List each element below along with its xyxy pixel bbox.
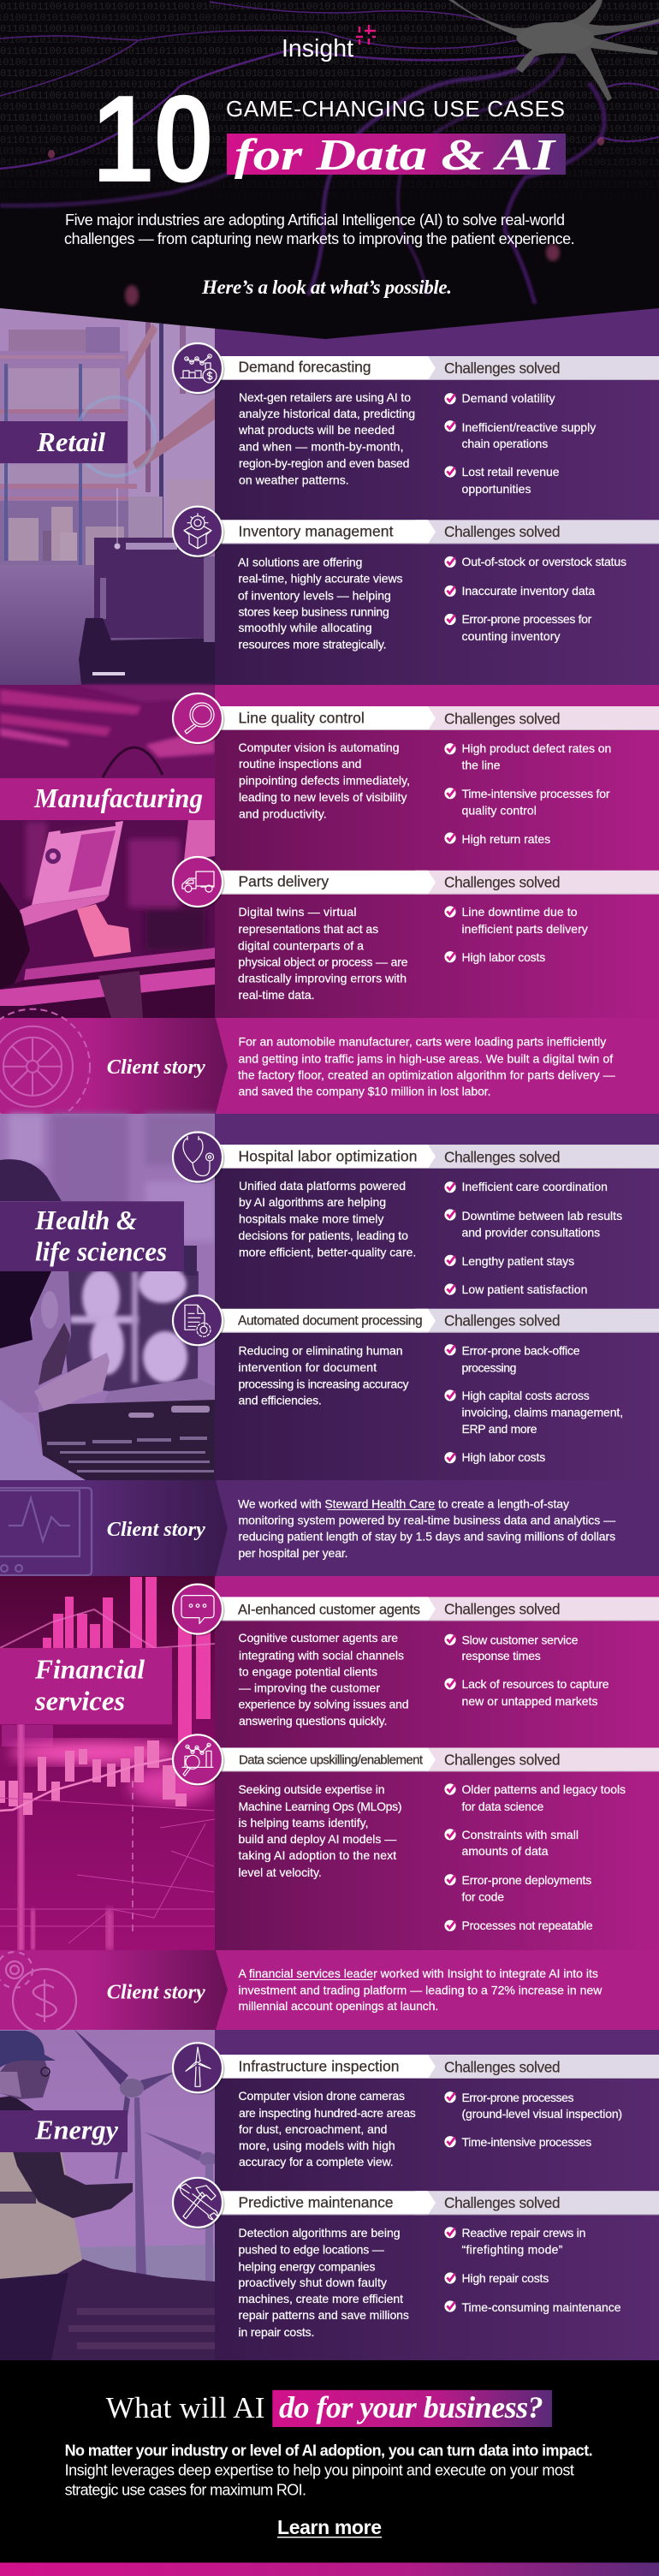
- panel: client story, automotive: [0, 1009, 659, 1124]
- use case: Predictive maintenance: [173, 2178, 659, 2339]
- industry label: Financial services: Financial: [34, 1654, 145, 1685]
- description: leading to new levels of visibility: [239, 790, 407, 804]
- header: [0, 0, 659, 339]
- description: [238, 390, 415, 486]
- industry label: Manufacturing: Manufacturing: [33, 782, 203, 813]
- use case: Data science upskilling: [173, 1734, 659, 1932]
- description: [238, 1343, 409, 1407]
- use case: Automated document processing: [173, 1295, 659, 1464]
- description: hospitals make more timely: [239, 1211, 383, 1225]
- photo: warehouse: [0, 308, 216, 685]
- description: [238, 2089, 416, 2168]
- use case: Inventory management: [173, 507, 659, 651]
- description: pinpointing defects immediately,: [239, 773, 410, 787]
- title band: Challenges solved: [444, 2194, 561, 2211]
- panel: manufacturing: [0, 685, 659, 1018]
- challenges list: Line downtime due to: [462, 905, 578, 919]
- title band: Challenges solved: [444, 360, 561, 377]
- industry label: Health and life sciences: Health &: [34, 1205, 137, 1235]
- industry label: Energy: Energy: [34, 2114, 119, 2145]
- industry label: Financial services: [0, 1648, 172, 1724]
- challenges list: Lengthy patient stays: [462, 1254, 574, 1268]
- description: routine inspections and: [239, 757, 361, 770]
- description: intervention for document: [238, 1360, 377, 1374]
- description: level at velocity.: [238, 1865, 322, 1879]
- story text: A financial services leader worked with Insight to integrate AI into its: [238, 1966, 598, 1980]
- challenges list: Processes not repeatable: [462, 1919, 593, 1932]
- challenges list: High labor costs: [462, 950, 545, 964]
- description: [238, 1782, 402, 1879]
- challenges list: quality control: [462, 803, 537, 817]
- description: Unified data platforms powered: [239, 1179, 406, 1193]
- description: Next-gen retailers are using AI to: [239, 390, 411, 404]
- challenges list: [444, 1180, 622, 1296]
- description: and efficiencies.: [238, 1393, 322, 1407]
- description: digital counterparts of a: [238, 938, 364, 952]
- heading: client story: Client story: [107, 1982, 205, 2004]
- icon: chart with magnifier: [173, 1734, 224, 1787]
- challenges list: [444, 1343, 623, 1464]
- challenges list: Error-prone deployments: [462, 1873, 591, 1887]
- description: more, using models with high: [239, 2139, 395, 2152]
- title band: Challenges solved: [444, 1148, 561, 1165]
- description: is helping teams identify,: [238, 1816, 368, 1829]
- description: Computer vision drone cameras: [238, 2089, 405, 2103]
- description: more efficient, better-quality care.: [239, 1245, 416, 1258]
- header background with neurons: [0, 0, 659, 339]
- industry label: Health and life sciences: [0, 1201, 184, 1271]
- title band: [214, 1309, 659, 1333]
- use case: AI-enhanced customer agents: [173, 1585, 659, 1728]
- use case: Hospital labor optimization: [173, 1132, 659, 1296]
- description: and productivity.: [239, 806, 327, 820]
- icon: stethoscope: [173, 1132, 224, 1184]
- challenges list: Lost retail revenue: [462, 465, 560, 479]
- industry label: Financial services: services: [34, 1686, 125, 1716]
- question heading: [106, 2390, 552, 2427]
- challenges list: and provider consultations: [462, 1225, 600, 1239]
- title band: [214, 1597, 659, 1621]
- challenges list: Time-intensive processes for: [462, 787, 610, 800]
- challenges list: [444, 2226, 621, 2314]
- description: — improving the customer: [239, 1681, 380, 1695]
- tagline: Here’s a look at what’s possible.: [201, 277, 452, 298]
- icon: wind turbine: [173, 2043, 224, 2095]
- title band: [214, 871, 659, 895]
- intro text: Five major industries are adopting Artificial Intelligence (AI) to solve real-world: [65, 211, 565, 229]
- panel: client story, financial services leader: [0, 1950, 659, 2032]
- challenges list: Inaccurate inventory data: [462, 584, 595, 598]
- use case: Demand forecasting: [173, 343, 659, 496]
- title band: [214, 520, 659, 544]
- challenges list: ERP and more: [462, 1422, 537, 1436]
- challenges list: counting inventory: [462, 629, 560, 643]
- challenges list: amounts of data: [462, 1844, 549, 1858]
- icon: truck: [173, 857, 224, 909]
- challenges list: the line: [462, 758, 501, 771]
- description: build and deploy AI models —: [238, 1832, 396, 1846]
- panel: health and life sciences: [0, 1114, 659, 1480]
- challenges list: chain operations: [462, 437, 548, 450]
- story text: investment and trading platform — leading to a 72% increase in new: [238, 1983, 603, 1996]
- industry label: Energy: [0, 2110, 128, 2152]
- description: physical object or process — are: [238, 955, 408, 968]
- title band: Challenges solved: [444, 523, 561, 540]
- icon: heart monitor: [0, 1488, 92, 1575]
- industry label: Retail: [0, 421, 128, 463]
- challenges list: Inefficient care coordination: [462, 1180, 608, 1193]
- description: processing is increasing accuracy: [238, 1377, 409, 1390]
- challenges list: (ground-level visual inspection): [462, 2107, 622, 2121]
- title band: Predictive maintenance: [238, 2193, 394, 2210]
- panel: financial services: [0, 1576, 659, 1952]
- challenges list: High labor costs: [462, 1450, 545, 1464]
- description: Detection algorithms are being: [238, 2226, 401, 2240]
- photo: financial charts: [0, 1576, 216, 1952]
- title band: Challenges solved: [444, 710, 561, 727]
- description: [238, 1631, 409, 1728]
- closing text: strategic use cases for maximum ROI.: [65, 2481, 306, 2498]
- challenges list: for code: [462, 1889, 504, 1903]
- icon: chat bubble: [173, 1585, 224, 1636]
- title band: Challenges solved: [444, 1312, 561, 1329]
- challenges list: [444, 555, 626, 643]
- title band: Challenges solved: [444, 1751, 561, 1768]
- description: Cognitive customer agents are: [238, 1631, 398, 1645]
- industry label: Health and life sciences: life sciences: [35, 1236, 167, 1267]
- description: on weather patterns.: [239, 473, 349, 486]
- description: real-time, highly accurate views: [238, 571, 402, 585]
- question heading: What will AI: [106, 2391, 264, 2424]
- right panel background: [215, 308, 659, 685]
- description: integrating with social channels: [239, 1648, 404, 1662]
- panel: energy: [0, 2029, 659, 2360]
- description: resources more strategically.: [238, 637, 387, 651]
- story text: and saved the company $10 million in lost labor.: [238, 1084, 491, 1098]
- description: machines, create more efficient: [238, 2292, 403, 2305]
- challenges list: Error-prone processes for: [462, 612, 592, 626]
- title band: Data science upskilling/enablement: [239, 1753, 424, 1768]
- challenges list: “firefighting mode”: [462, 2242, 563, 2256]
- title band: Inventory management: [238, 523, 394, 540]
- industry label: Retail: Retail: [36, 426, 105, 457]
- challenges list: Out-of-stock or overstock status: [462, 555, 626, 568]
- challenges list: [444, 391, 596, 496]
- intro text: [64, 211, 575, 247]
- challenges list: Error-prone processes: [462, 2091, 573, 2104]
- heading: client story: Client story: [107, 1056, 205, 1079]
- panel: client story, Steward Health Care: [0, 1480, 659, 1576]
- photo: engineer and wind turbines: [0, 2029, 217, 2360]
- description: [238, 555, 402, 651]
- description: pushed to edge locations —: [238, 2242, 384, 2256]
- description: Digital twins — virtual: [238, 905, 356, 919]
- story text: For an automobile manufacturer, carts were loading parts inefficiently: [238, 1034, 606, 1048]
- description: real-time data.: [238, 988, 315, 1002]
- question heading: do for your business?: [279, 2390, 543, 2424]
- right panel background: [215, 1576, 659, 1950]
- challenges list: Demand volatility: [462, 391, 555, 405]
- challenges list: inefficient parts delivery: [462, 922, 588, 936]
- description: answering questions quickly.: [239, 1714, 387, 1728]
- use case: Line quality control: [173, 693, 659, 846]
- logo: Insight: Insight: [282, 35, 353, 62]
- challenges list: Low patient satisfaction: [462, 1282, 587, 1296]
- title band: Automated document processing: [238, 1313, 423, 1329]
- description: taking AI adoption to the next: [238, 1848, 396, 1862]
- title band: [214, 1748, 659, 1772]
- description: experience by solving issues and: [238, 1697, 409, 1710]
- icon: wrench and hammer: [173, 2178, 224, 2229]
- description: by AI algorithms are helping: [239, 1195, 386, 1209]
- title band: [214, 356, 659, 380]
- description: for dust, encroachment, and: [239, 2122, 387, 2136]
- icon: document and gear: [173, 1295, 224, 1347]
- description: of inventory levels — helping: [238, 588, 391, 602]
- challenges list: [444, 1633, 609, 1708]
- icon: chart and dollar: [173, 343, 224, 396]
- panel: retail: [0, 308, 659, 685]
- right panel background: [215, 2030, 659, 2360]
- right panel background: [215, 1114, 659, 1480]
- story text: millennial account openings at launch.: [238, 1999, 438, 2013]
- challenges list: processing: [462, 1360, 516, 1374]
- description: accuracy for a complete view.: [239, 2155, 394, 2168]
- closing text: No matter your industry or level of AI adoption, you can turn data into impact.: [65, 2442, 593, 2459]
- challenges list: Time-consuming maintenance: [462, 2300, 621, 2314]
- title band: Parts delivery: [238, 872, 329, 889]
- description: [238, 741, 410, 820]
- title band: Infrastructure inspection: [238, 2058, 399, 2075]
- description: [238, 905, 408, 1002]
- right panel background: [215, 685, 659, 1018]
- challenges list: Older patterns and legacy tools: [462, 1782, 626, 1796]
- footer call to action: [0, 2360, 659, 2576]
- icon: tire: [0, 1009, 90, 1124]
- story text: monitoring system powered by real-time business data and analytics —: [238, 1513, 615, 1526]
- use case: Parts delivery: [173, 857, 659, 1002]
- description: repair patterns and save millions: [238, 2308, 409, 2322]
- challenges list: Slow customer service: [462, 1633, 579, 1646]
- challenges list: High capital costs across: [462, 1389, 590, 1402]
- footer gradient bar: [0, 2562, 659, 2576]
- industry label: Manufacturing: [0, 778, 215, 820]
- story text: and getting into traffic jams in high-use areas. We built a digital twin of: [238, 1051, 613, 1065]
- story text: [238, 1034, 615, 1098]
- description: [238, 1179, 416, 1258]
- challenges list: High product defect rates on: [462, 741, 611, 755]
- title band: Hospital labor optimization: [238, 1148, 418, 1165]
- challenges list: Reactive repair crews in: [462, 2226, 585, 2240]
- title band: AI-enhanced customer agents: [238, 1603, 420, 1618]
- logo: Insight: [282, 25, 376, 62]
- icon: gear in box: [173, 507, 224, 558]
- challenges list: opportunities: [462, 482, 531, 496]
- challenges list: Lack of resources to capture: [462, 1677, 609, 1691]
- learn more link: Learn more: [277, 2516, 382, 2538]
- challenges list: new or untapped markets: [462, 1694, 597, 1708]
- description: representations that act as: [238, 922, 378, 936]
- title: 10: 10: [92, 69, 214, 208]
- description: in repair costs.: [238, 2325, 314, 2339]
- intro text: challenges — from capturing new markets to improving the patient experience.: [64, 230, 575, 247]
- title band: Demand forecasting: [238, 358, 371, 375]
- title: game-changing use cases: GAME-CHANGING USE CASES: [226, 96, 565, 122]
- description: Reducing or eliminating human: [238, 1343, 402, 1357]
- photo: doctor at monitor: [0, 1114, 216, 1480]
- description: proactively shut down faulty: [238, 2276, 387, 2289]
- challenges list: Error-prone back-office: [462, 1343, 580, 1357]
- closing text: Insight leverages deep expertise to help you pinpoint and execute on your most: [65, 2461, 574, 2478]
- challenges list: invoicing, claims management,: [462, 1405, 623, 1419]
- heading: client story: Client story: [107, 1519, 205, 1541]
- story text: [238, 1966, 603, 2013]
- title band: [214, 1145, 659, 1169]
- description: stores keep business running: [238, 604, 389, 618]
- use case: Infrastructure inspection: [173, 2043, 659, 2168]
- description: AI solutions are offering: [238, 555, 362, 568]
- title band: Challenges solved: [444, 2058, 561, 2075]
- story text: reducing patient length of stay by 1.5 days and saving millions of dollars: [238, 1530, 615, 1544]
- description: are inspecting hundred-acre areas: [239, 2106, 416, 2120]
- description: what products will be needed: [238, 423, 395, 437]
- title band: [214, 706, 659, 730]
- challenges list: for data science: [462, 1800, 544, 1813]
- description: and when — month-by-month,: [239, 439, 404, 453]
- title band: [214, 2191, 659, 2215]
- photo: factory laptop: [0, 685, 216, 1018]
- icon: gear and dollar: [0, 1952, 76, 2032]
- description: Machine Learning Ops (MLOps): [238, 1800, 402, 1813]
- closing text: [65, 2442, 593, 2498]
- challenges list: [444, 741, 611, 846]
- story text: We worked with Steward Health Care to create a length-of-stay: [238, 1496, 569, 1510]
- challenges list: Inefficient/reactive supply: [462, 420, 596, 434]
- description: drastically improving errors with: [238, 971, 407, 985]
- description: Seeking outside expertise in: [238, 1782, 385, 1796]
- description: region-by-region and even based: [239, 456, 409, 470]
- title band: [214, 2055, 659, 2079]
- description: decisions for patients, leading to: [238, 1229, 408, 1242]
- challenges list: Constraints with small: [462, 1828, 579, 1841]
- challenges list: response times: [462, 1649, 541, 1663]
- description: helping energy companies: [238, 2260, 375, 2274]
- challenges list: High return rates: [462, 832, 550, 846]
- description: Computer vision is automating: [238, 741, 399, 754]
- challenges list: Time-intensive processes: [462, 2135, 591, 2149]
- description: analyze historical data, predicting: [239, 407, 415, 420]
- title band: Challenges solved: [444, 873, 561, 890]
- challenges list: [444, 2091, 622, 2149]
- challenges list: High repair costs: [462, 2271, 549, 2285]
- challenges list: [444, 905, 588, 964]
- story text: [238, 1496, 615, 1560]
- description: to engage potential clients: [239, 1664, 377, 1678]
- challenges list: [444, 1782, 626, 1932]
- story text: the factory floor, created an optimization algorithm for parts delivery —: [238, 1068, 615, 1081]
- icon: magnifying glass: [173, 693, 224, 745]
- title band: Challenges solved: [444, 1601, 561, 1618]
- description: [238, 2226, 409, 2339]
- title highlight: for Data and AI: for Data & AI: [235, 131, 556, 180]
- title band: Line quality control: [238, 709, 365, 726]
- description: smoothly while allocating: [238, 621, 371, 634]
- story text: per hospital per year.: [238, 1546, 347, 1560]
- challenges list: Downtime between lab results: [462, 1209, 622, 1223]
